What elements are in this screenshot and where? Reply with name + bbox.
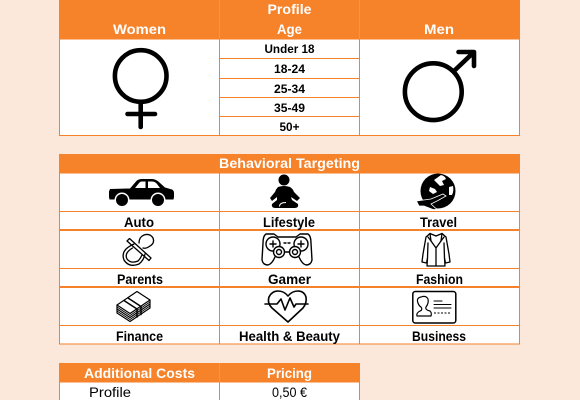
panel: additional costs — [59, 363, 360, 400]
costs table body — [60, 382, 360, 400]
icon: car — [109, 179, 174, 208]
label: Health & Beauty: Health & Beauty — [239, 329, 340, 344]
profile header band — [59, 0, 520, 39]
icon: female symbol — [115, 50, 166, 127]
label: Fashion: Fashion — [416, 272, 463, 287]
icon: male symbol — [405, 52, 474, 120]
label: Business: Business — [412, 329, 466, 344]
label: Finance: Finance — [116, 329, 163, 344]
price: 0,50 euro: 0,50 € — [272, 385, 307, 400]
heading: Pricing: Pricing — [267, 365, 312, 381]
heading: Age: Age — [277, 21, 302, 37]
icon: game controller — [262, 234, 312, 265]
profile table body — [60, 39, 520, 136]
icon: pacifier — [123, 234, 154, 265]
label: Travel: Travel — [420, 215, 457, 230]
row label: Profile: Profile — [89, 385, 131, 400]
icon: stack of banknotes — [117, 292, 150, 322]
label: Lifestyle: Lifestyle — [263, 215, 315, 230]
icon: meditating person — [270, 174, 300, 208]
panel: behavioral targeting — [59, 154, 520, 344]
age list — [264, 44, 315, 134]
heading: Additional Costs: Additional Costs — [84, 365, 195, 381]
label: Gamer: Gamer — [268, 272, 312, 287]
label: Parents: Parents — [117, 272, 163, 287]
heading: Men: Men — [424, 21, 454, 37]
age: 50+: 50+ — [280, 122, 300, 134]
icon: heart with pulse — [265, 291, 308, 322]
icon: business card — [413, 292, 456, 323]
heading: behavioral targeting: Behavioral Targeting — [219, 155, 360, 171]
behavioral table body — [60, 173, 520, 344]
age: 25-34: 25-34 — [274, 84, 306, 96]
panel: profile table — [59, 0, 520, 136]
behavioral header band — [59, 154, 520, 174]
label: Auto: Auto — [124, 215, 154, 230]
heading: Profile: Profile — [268, 1, 312, 17]
age: 35-49: 35-49 — [274, 103, 305, 115]
age: 18-24: 18-24 — [274, 64, 306, 76]
icon: globe with plane — [416, 174, 456, 210]
age: under 18: Under 18 — [264, 44, 315, 56]
heading: Women: Women — [113, 21, 166, 37]
icon: coat — [422, 234, 450, 266]
costs header band — [59, 363, 360, 382]
